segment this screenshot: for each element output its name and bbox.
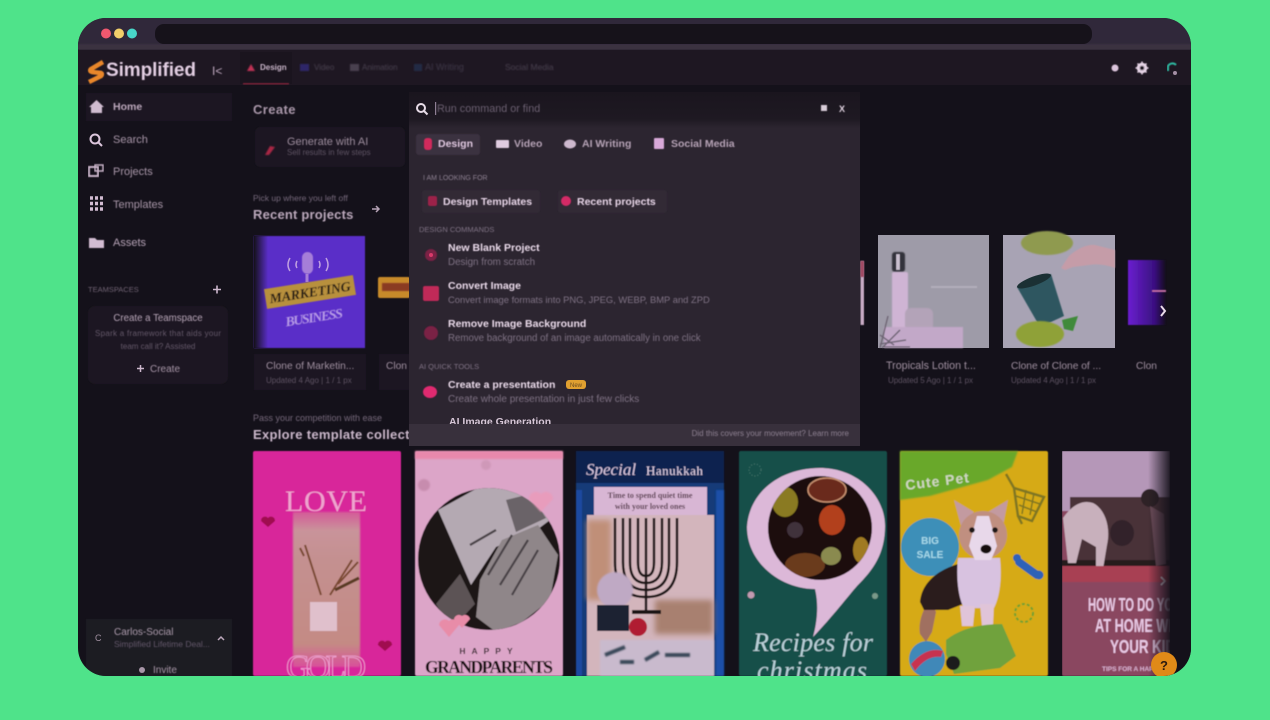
top navigation bar: AI Writing [425,62,464,72]
template card: happy grandparents [415,451,563,677]
section: AI quick tools [409,362,860,446]
command palette modal [409,92,864,446]
teamspaces panel: Create [150,364,180,375]
search input [417,102,845,115]
project card: clone partly hidden: Clon [386,361,407,372]
workspace switcher: C [95,633,102,643]
project card: marketing business: MARKETING [268,280,352,307]
heading: Explore template collections [253,413,410,442]
template card: love gold [253,451,401,686]
category tabs [416,134,735,155]
section: AI quick tools: Create a presentation [448,379,555,391]
heading: Create: Create [253,102,296,117]
teamspaces panel: team call it? Assisted [121,342,195,351]
teamspaces panel: Create a Teamspace [113,313,203,324]
template card: how to do yoga at home: HOW TO DO YOGA [1088,595,1190,615]
top navigation bar [78,50,1191,85]
sidebar menu: Projects [113,166,153,178]
template card: recipes for christmas: christmas [757,656,867,685]
project card: marketing business: Updated 4 Ago | 1 / 1 px [266,376,352,385]
section: design commands: Remove background of an image automatically in one click [448,333,701,344]
workspace switcher: Invite [153,665,177,676]
help button [1151,652,1177,678]
section: I am looking for: I AM LOOKING FOR [423,175,488,182]
heading: Explore template collections: Explore template collect [253,427,410,442]
category tabs: Design [438,138,473,150]
section: I am looking for: Recent projects [577,196,656,208]
sidebar menu: Home [113,101,142,113]
sidebar menu: Search [113,134,148,146]
template card: special hanukkah: Hanukkah [646,463,703,478]
generate with AI card: Generate with AI [287,136,368,148]
template card: special hanukkah: Special [586,460,636,479]
category tabs: Social Media [671,138,735,150]
template card: cute pet: Cute Pet [904,469,971,493]
heading: Explore template collections: Pass your competition with ease [253,413,382,423]
template card: cute pet: BIG [921,536,939,547]
workspace switcher: Simplified Lifetime Deal... [114,639,210,649]
category tabs: AI Writing [582,138,631,150]
project card: marketing business: Clone of Marketin... [266,361,354,372]
template card: recipes for christmas: Recipes for [752,628,874,657]
section: AI quick tools: AI QUICK TOOLS [419,362,479,371]
section: AI quick tools: New [570,383,583,389]
section: design commands [419,225,710,344]
section: design commands: Design from scratch [448,257,535,268]
help button: ? [1160,658,1168,673]
workspace switcher [86,619,232,676]
template card: cute pet [900,451,1048,677]
project card: tropical lotion: Tropicals Lotion t... [886,360,976,372]
teamspaces panel: Spark a framework that aids your [95,329,221,338]
top navigation bar: Animation [362,63,398,72]
template card: how to do yoga at home: AT HOME WITH [1095,616,1189,636]
logo: Simplified: I< [212,64,222,78]
right edge fade over template row [1148,451,1172,676]
section: design commands: Convert Image [448,280,521,292]
section: design commands: DESIGN COMMANDS [419,225,494,234]
generate with AI card [255,127,405,167]
project card: clone partly hidden [378,277,411,390]
footer hint: Did this covers your movement? Learn more [692,429,850,438]
project card: marketing business: BUSINESS [283,307,344,331]
template card: recipes for christmas [739,451,887,685]
template card: special hanukkah: Time to spend quiet time [608,491,693,500]
top navigation bar: Design [260,63,287,72]
workspace switcher: Carlos-Social [114,627,173,638]
project card: green cup: Clone of Clone of ... [1011,361,1101,372]
template card: love gold: LOVE [285,485,367,518]
top navigation bar: Video [314,63,335,72]
section: AI quick tools: AI Image Generation [449,416,551,428]
sidebar menu: Templates [113,199,164,211]
search input: X [839,104,845,114]
template card: how to do yoga at home: TIPS FOR A HAPPY LIFE [1102,666,1179,673]
template card: special hanukkah [576,451,724,676]
project card: green cup: Updated 4 Ago | 1 / 1 px [1011,376,1096,385]
generate with AI card: Sell results in few steps [287,148,371,157]
top navigation bar: Social Media [505,62,554,72]
section: I am looking for [422,175,667,213]
section: AI quick tools: Create whole presentation in just few clicks [448,394,639,405]
section: design commands: Convert image formats into PNG, JPEG, WEBP, BMP and ZPD [448,294,710,305]
section: I am looking for: Design Templates [443,196,532,208]
project card: marketing business [254,236,366,390]
section: design commands: New Blank Project [448,242,540,254]
template card: how to do yoga at home: YOUR KIDS [1110,637,1184,657]
category tabs: Video [514,138,542,150]
sidebar menu: Assets [113,237,147,249]
template card: happy grandparents: HAPPY [459,646,519,656]
heading: Recent projects: Pick up where you left off [253,193,348,203]
template card: special hanukkah: with your loved ones [615,502,685,511]
teamspaces panel [88,285,228,384]
project card: purple partly hidden [1128,260,1166,372]
sidebar menu [86,93,232,249]
section: design commands: Remove Image Background [448,318,586,330]
project card: tropical lotion [878,235,989,385]
logo: Simplified: Simplified [106,60,196,81]
heading: Recent projects [253,193,379,222]
browser title bar [78,18,1191,50]
scrollbar [860,261,864,325]
template card: love gold: GOLD [286,649,366,686]
template card: how to do yoga at home [1062,451,1170,676]
project card: purple partly hidden: Clon [1136,361,1157,372]
heading: Recent projects: Recent projects [253,207,354,222]
logo: Simplified [89,60,222,82]
teamspaces panel: TEAMSPACES [88,285,139,294]
project card: tropical lotion: Updated 5 Ago | 1 / 1 px [888,376,973,385]
template card: cute pet: SALE [917,550,944,561]
template card: happy grandparents: GRANDPARENTS [425,657,553,677]
search input: Run command or find [437,103,540,115]
project card: green cup [1003,231,1115,385]
